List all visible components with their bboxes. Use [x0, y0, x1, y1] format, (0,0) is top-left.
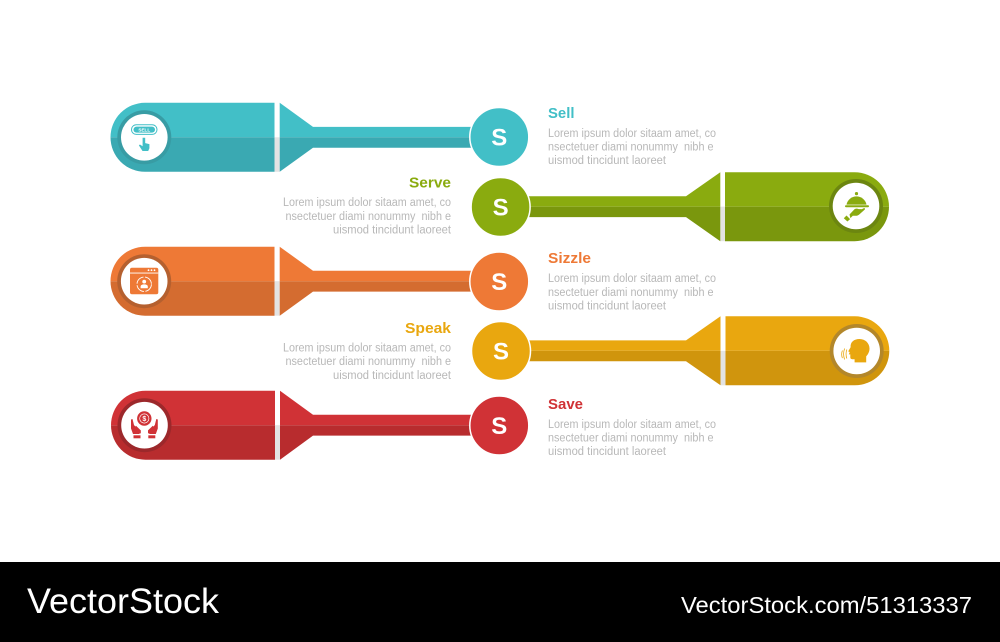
footer bar — [0, 562, 1000, 642]
connector arrow: Save — [280, 391, 472, 460]
badge: S — [470, 396, 529, 455]
text: Save: Lorem ipsum dolor sitaam amet, co — [548, 419, 716, 431]
text: Serve: Lorem ipsum dolor sitaam amet, co — [283, 197, 451, 209]
connector arrow: Serve — [528, 172, 720, 241]
text: Save: Save — [548, 397, 583, 413]
text: Serve: nsectetuer diami nonummy nibh e — [286, 211, 451, 223]
footer logo text: VectorStock — [27, 582, 220, 621]
panel: Sell row — [110, 103, 716, 172]
icon: speaking head — [830, 324, 884, 378]
text: Serve — [283, 176, 452, 236]
capsule: Save — [111, 391, 280, 460]
text: Save — [548, 397, 716, 458]
badge: S: S — [493, 195, 509, 222]
text: Sizzle: nsectetuer diami nonummy nibh e — [548, 287, 714, 299]
badge: S: S — [491, 125, 507, 152]
panel: Serve row — [283, 172, 889, 241]
connector arrow: Sizzle — [280, 247, 472, 316]
badge: S — [470, 108, 529, 166]
icon: hands holding coin: $ — [142, 416, 146, 423]
badge: S: S — [493, 339, 509, 366]
text: Save: nsectetuer diami nonummy nibh e — [548, 433, 714, 445]
badge: S: S — [491, 269, 507, 296]
text: Serve: Serve — [409, 176, 451, 192]
connector arrow: Speak — [528, 316, 720, 385]
connector arrow: Sell — [280, 103, 472, 172]
text: Speak: Lorem ipsum dolor sitaam amet, co — [283, 342, 451, 354]
text: Speak — [283, 321, 452, 382]
badge: S — [470, 252, 529, 311]
text: Sizzle — [548, 251, 716, 312]
capsule: Serve — [720, 172, 889, 241]
icon: hands holding coin — [118, 398, 172, 452]
capsule: Speak — [720, 316, 889, 385]
text: Speak: nsectetuer diami nonummy nibh e — [286, 356, 451, 368]
text: Sizzle: Sizzle — [548, 251, 591, 267]
capsule: Sizzle — [110, 247, 280, 316]
text: Sizzle: uismod tincidunt laoreet — [548, 300, 667, 312]
text: Sell: uismod tincidunt laoreet — [548, 155, 667, 167]
icon: serving cloche on hand — [829, 179, 883, 233]
capsule: Sell — [110, 103, 280, 172]
text: Sell: Lorem ipsum dolor sitaam amet, co — [548, 128, 716, 140]
icon: sell button with pointing hand: SELL — [138, 128, 150, 133]
badge: S: S — [491, 413, 507, 440]
badge: S — [471, 178, 530, 236]
text: Sizzle: Lorem ipsum dolor sitaam amet, co — [548, 273, 716, 285]
text: Speak: Speak — [405, 321, 452, 337]
panel: Save row — [111, 391, 716, 460]
icon: sell button with pointing hand — [117, 110, 171, 164]
footer url text: VectorStock.com/51313337 — [681, 592, 972, 618]
text: Speak: uismod tincidunt laoreet — [333, 370, 452, 382]
text: Serve: uismod tincidunt laoreet — [333, 224, 452, 236]
text: Sell: nsectetuer diami nonummy nibh e — [548, 142, 714, 154]
icon: browser window with user — [117, 254, 171, 308]
panel: Speak row — [283, 316, 889, 385]
badge: S — [472, 322, 530, 380]
text: Save: uismod tincidunt laoreet — [548, 446, 667, 458]
panel: Sizzle row — [110, 247, 716, 316]
text: Sell: Sell — [548, 106, 574, 122]
text: Sell — [548, 106, 716, 167]
